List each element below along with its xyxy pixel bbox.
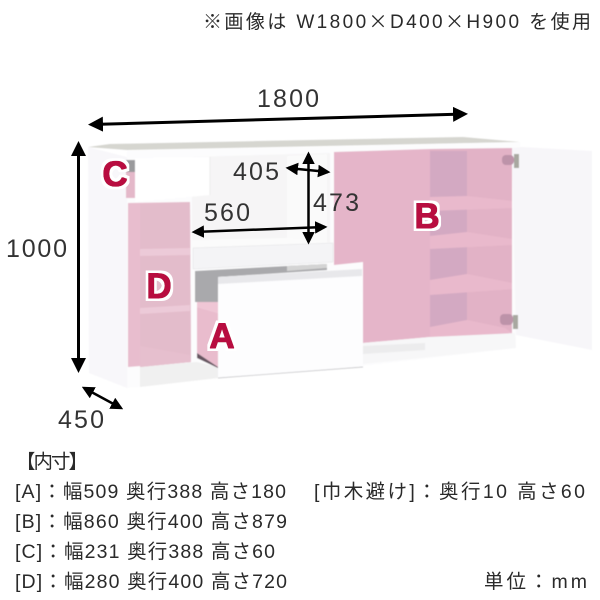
dimension arrow: depth 450 xyxy=(84,388,121,408)
dark gap below thin drawer xyxy=(195,264,327,303)
open right door xyxy=(512,147,592,350)
dimension label: 473: 473 xyxy=(313,189,359,217)
open drawer A interior xyxy=(197,302,218,368)
door hinges xyxy=(500,154,519,329)
row B: [B]：幅860 奥行400 高さ879 xyxy=(15,511,287,533)
dimension arrow: opening depth 405 xyxy=(288,168,328,172)
dimension label: 405: 405 xyxy=(233,158,279,186)
cabinet top surface xyxy=(88,137,520,150)
center opening xyxy=(192,153,333,250)
dimension label: 1000: 1000 xyxy=(6,235,67,263)
marker label A: A xyxy=(209,317,235,356)
panel B: open shelf compartment xyxy=(430,148,512,337)
marker label C: C xyxy=(102,155,128,194)
baseboard clearance note: [巾木避け]：奥行10 高さ60 xyxy=(314,481,585,503)
lower plinth under compartment D xyxy=(140,362,218,387)
lighter part of gap xyxy=(287,264,327,271)
drawer C xyxy=(126,157,210,202)
drawer A front xyxy=(218,269,363,378)
cabinet illustration xyxy=(88,137,592,388)
unit note: 単位：mm xyxy=(484,571,587,593)
dimension arrow: height 1000 xyxy=(77,144,80,370)
dimension arrow: opening width 560 xyxy=(194,227,325,232)
dimension arrow: width 1800 xyxy=(91,114,465,124)
marker label D: D xyxy=(146,267,172,306)
cabinet left side panel xyxy=(88,147,127,388)
row D: [D]：幅280 奥行400 高さ720 xyxy=(15,571,287,593)
row A: [A]：幅509 奥行388 高さ180 xyxy=(15,481,286,503)
thin drawer xyxy=(193,243,333,269)
note: model size used: ※画像は W1800×D400×H900 を使用 xyxy=(203,7,591,34)
row C: [C]：幅231 奥行388 高さ60 xyxy=(15,541,275,563)
dimension label: 1800: 1800 xyxy=(257,85,319,113)
base plinth xyxy=(363,333,516,364)
marker label B: B xyxy=(414,197,440,236)
dimension label: 450: 450 xyxy=(58,406,104,434)
inner dimensions list xyxy=(15,481,287,593)
plinth recess xyxy=(363,343,425,354)
dimension arrow: opening height 473 xyxy=(307,154,310,242)
panel B: pink door xyxy=(334,149,430,343)
inner dimensions heading: 【内寸】 xyxy=(16,451,88,473)
panel D: pink shelf compartment xyxy=(128,202,191,367)
dimension label: 560: 560 xyxy=(204,199,250,227)
cabinet front body xyxy=(127,142,520,388)
